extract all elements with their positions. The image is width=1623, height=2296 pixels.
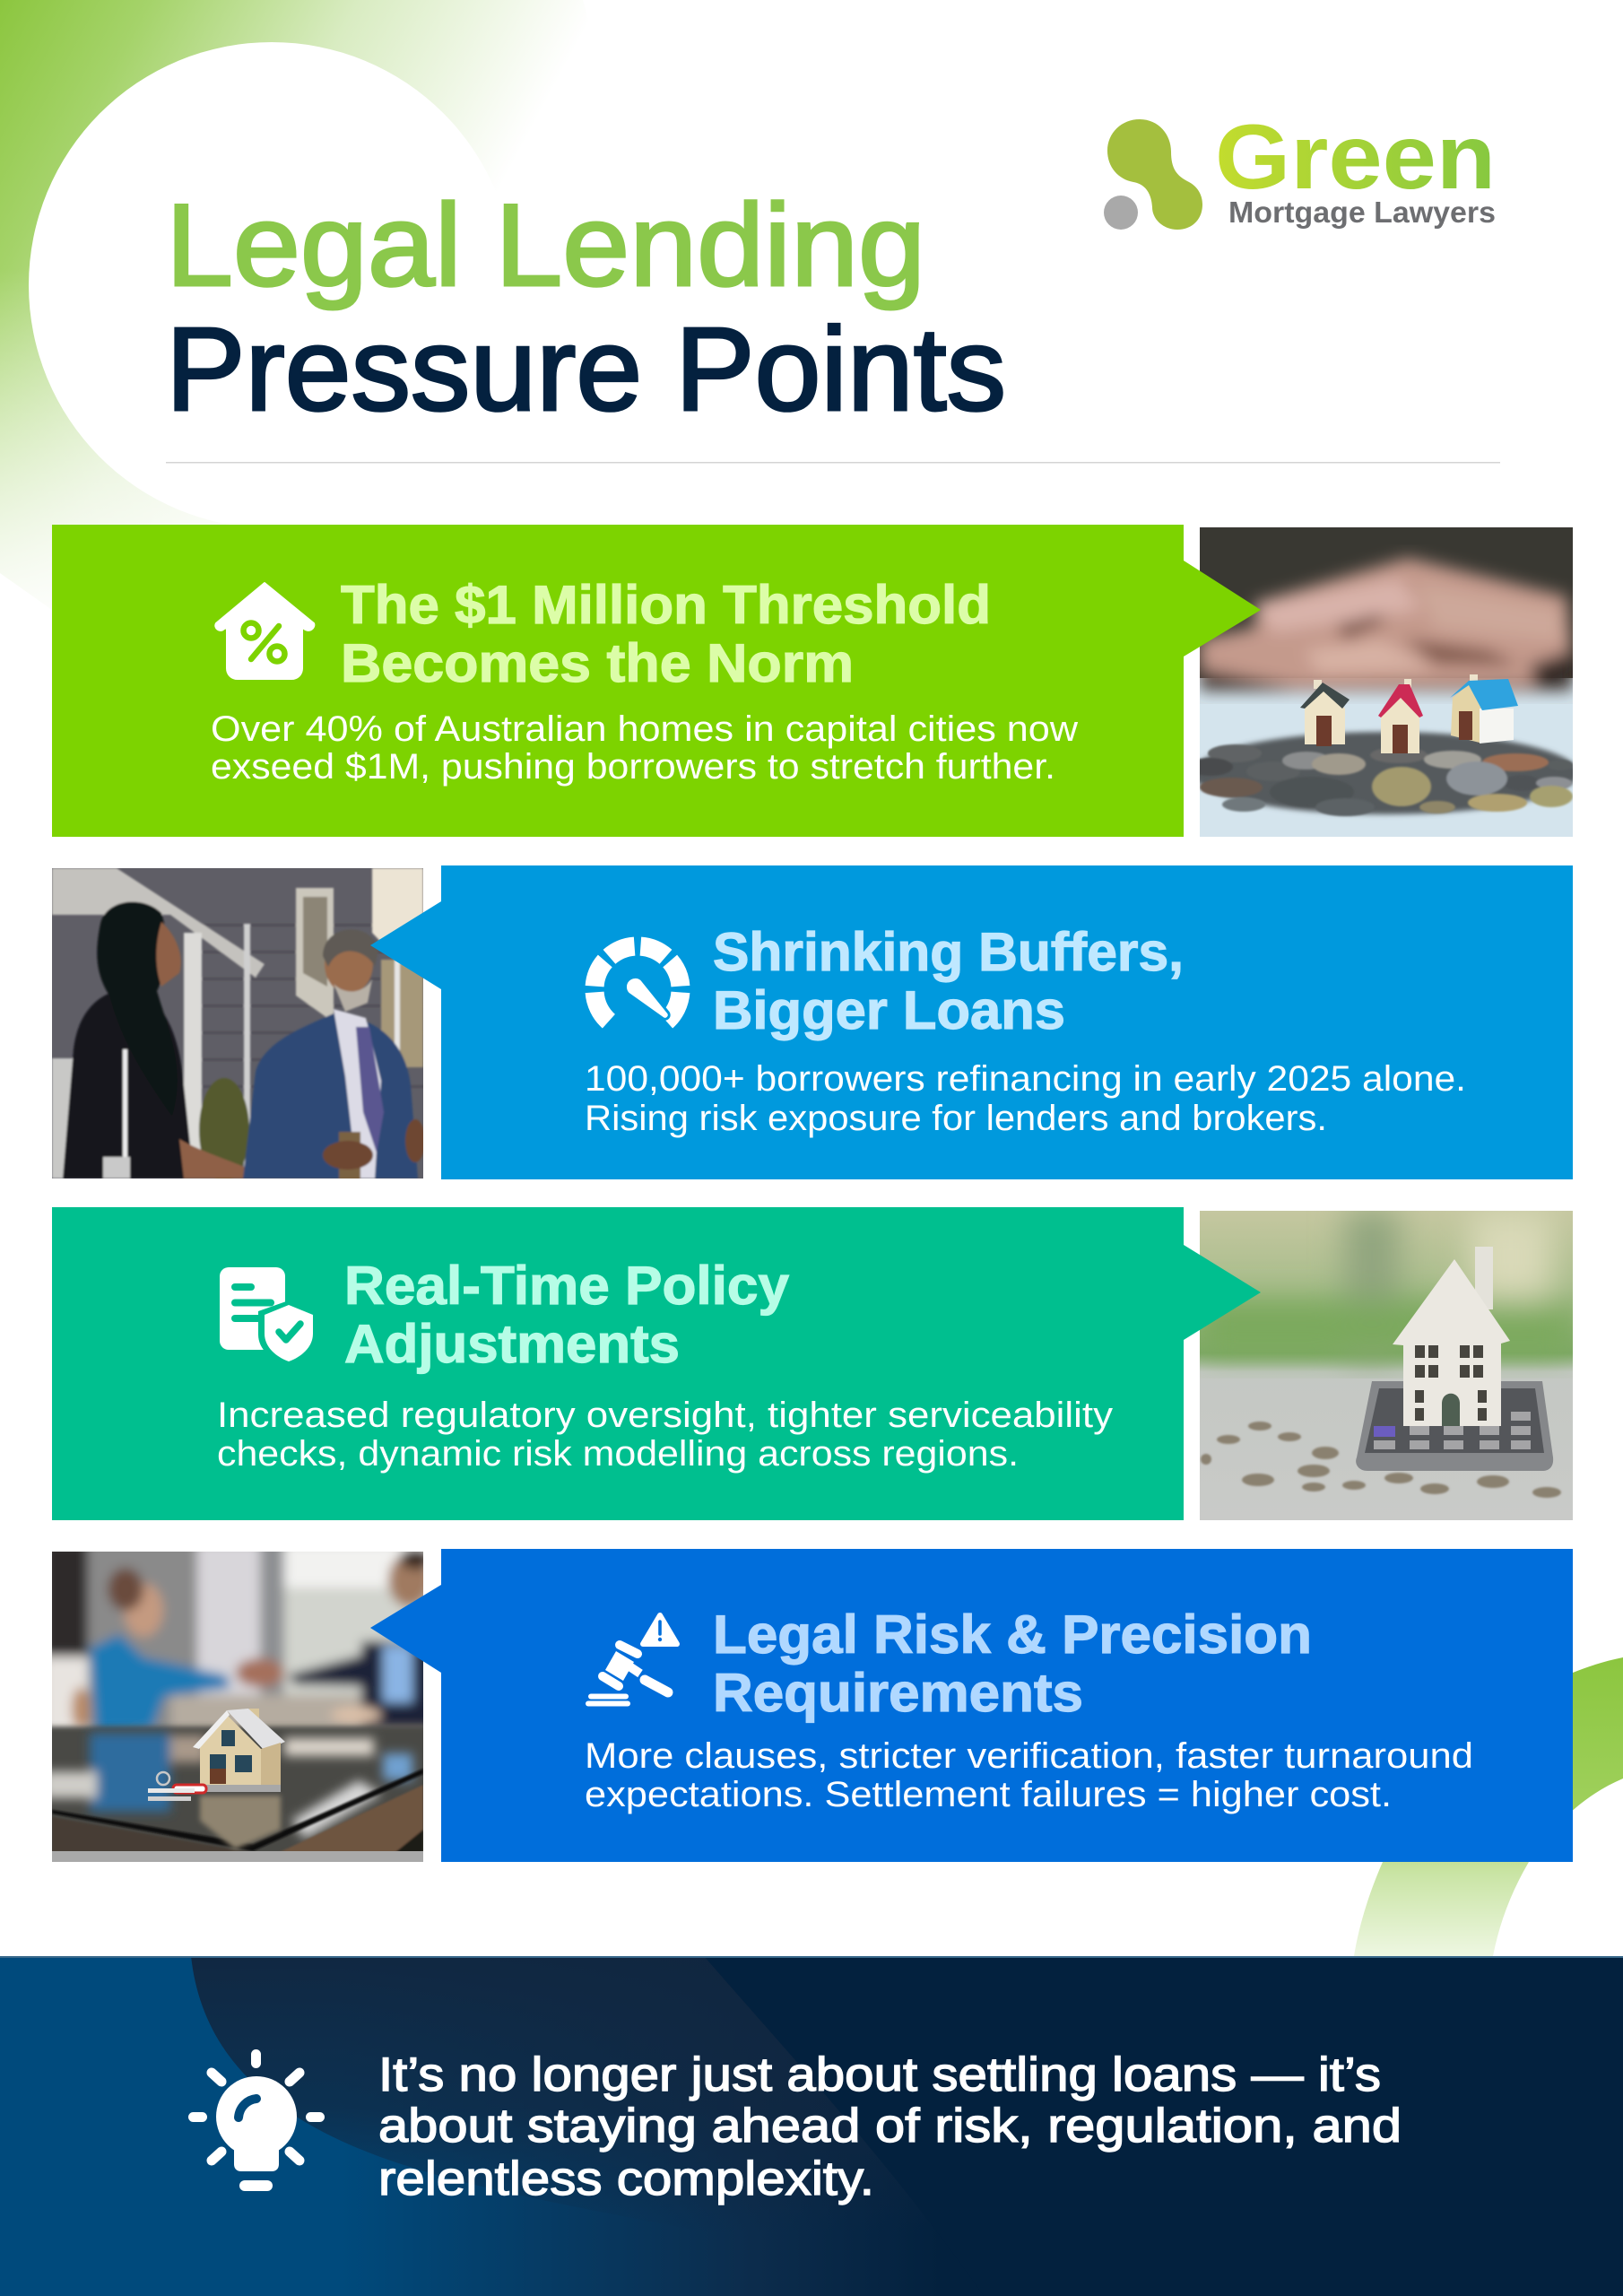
icon: gauge [595,946,681,1022]
heading: Becomes the Norm [341,633,854,693]
calculator [1356,1381,1553,1471]
coins [1201,1422,1561,1498]
mini houses [1300,674,1518,753]
heading [341,575,991,693]
heading: The $1 Million Threshold [341,575,991,635]
closing statement [378,2048,1402,2205]
reflective table [43,1726,432,1860]
logo: Green Mortgage Lawyers [1104,106,1496,230]
icon: document with shield [220,1267,318,1367]
background: bottom-right green ring [1354,1657,1623,1956]
body text: expectations. Settlement failures = higher cost. [585,1775,1392,1814]
panel background with arrow [370,1549,1573,1862]
heading: Adjustments [344,1314,680,1374]
heading: Real-Time Policy [344,1256,790,1316]
panel: shrinking buffers [370,865,1573,1179]
heading [713,1605,1312,1723]
heading [713,922,1184,1040]
paper house [1393,1247,1510,1426]
body text [217,1396,1113,1474]
woman [61,900,246,1178]
closing statement: about staying ahead of risk, regulation, and [378,2100,1402,2152]
closing statement: It’s no longer just about settling loans — it’s [378,2048,1381,2101]
body text: exseed $1M, pushing borrowers to stretch further. [211,747,1055,787]
heading: Shrinking Buffers, [713,922,1184,982]
body text: Rising risk exposure for lenders and brokers. [585,1099,1327,1138]
house keys [148,1772,206,1801]
body text: 100,000+ borrowers refinancing in early 2025 alone. [585,1059,1466,1099]
body text: More clauses, stricter verification, faster turnaround [585,1736,1473,1776]
panel background with arrow [52,1207,1261,1520]
body text: Over 40% of Australian homes in capital cities now [211,709,1078,749]
icon: light bulb [188,2049,325,2191]
icon: gavel with warning [588,1615,677,1704]
title line 2: Pressure Points [166,303,1006,435]
heading: Legal Risk & Precision [713,1605,1312,1665]
photo: paper house on calculator [1200,1211,1573,1520]
heading: Bigger Loans [713,980,1065,1040]
panel: legal risk and precision [370,1549,1573,1862]
body text: checks, dynamic risk modelling across regions. [217,1434,1019,1474]
icon: house with percent [215,583,314,679]
heading: Requirements [713,1663,1083,1723]
logo wordmark: Green [1215,106,1496,208]
panel: $1 million threshold [52,525,1261,837]
panel background with arrow [52,525,1261,837]
body text [585,1736,1473,1814]
logo tagline: Mortgage Lawyers [1228,196,1496,229]
model house [193,1709,285,1849]
background: top-left green gradient swoosh [0,0,595,619]
title line 1: Legal Lending [166,179,925,310]
body text: Increased regulatory oversight, tighter serviceability [217,1396,1113,1435]
man [243,929,425,1180]
photo: handshake with model house [43,1543,433,1862]
photo: model houses on coins [1188,527,1578,837]
panel: real-time policy adjustments [52,1207,1261,1520]
panel background with arrow [370,865,1573,1179]
body text [585,1059,1466,1138]
footer background [0,1956,1623,2296]
title [166,179,1006,435]
footer band [0,1956,1623,2296]
heading [344,1256,790,1374]
closing statement: relentless complexity. [378,2152,874,2205]
body text [211,709,1078,787]
photo: couple outside house [52,868,426,1182]
logo mark [1104,119,1202,230]
